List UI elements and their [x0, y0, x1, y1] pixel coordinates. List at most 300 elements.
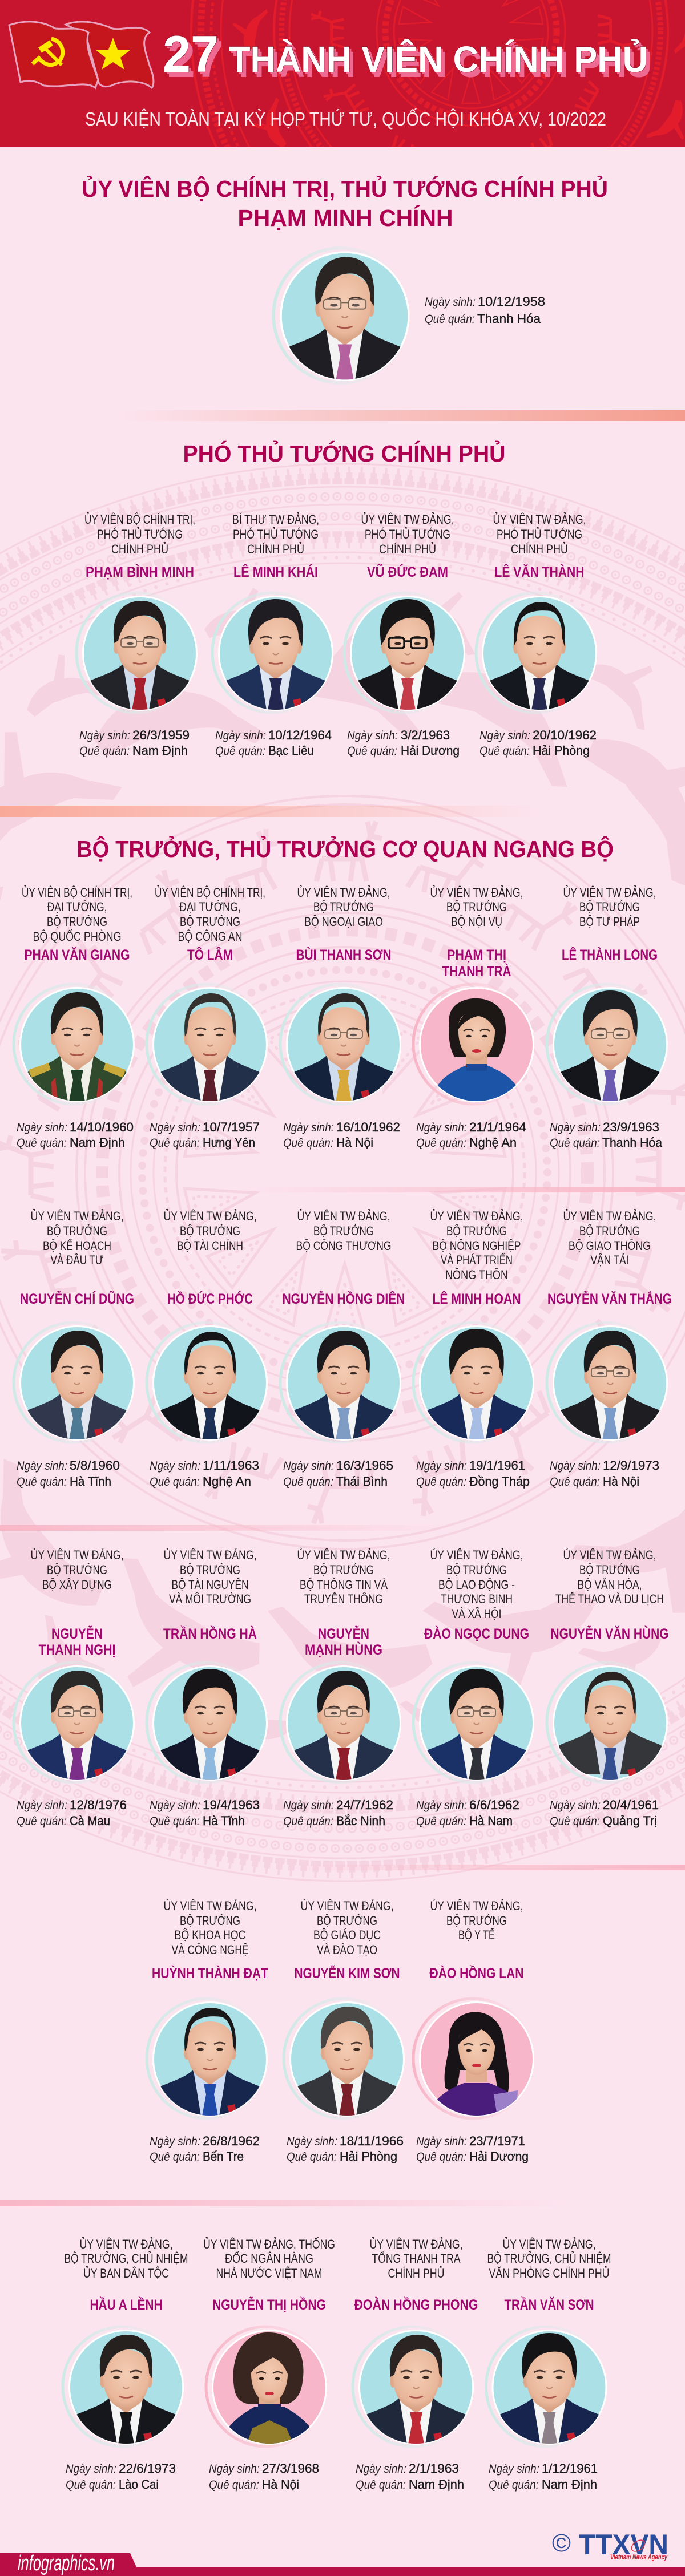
role: CHÍNH PHỦ	[111, 542, 168, 556]
portrait	[280, 1663, 408, 1782]
info: Hải Phòng	[533, 743, 590, 758]
role: ỦY VIÊN TW ĐẢNG,	[297, 885, 390, 900]
heading: Deputy Prime Ministers: PHÓ THỦ TƯỚNG CHÍNH PHỦ	[183, 440, 506, 467]
role: ỦY VIÊN TW ĐẢNG,	[370, 2237, 462, 2251]
member: Nguyễn Kim Sơn	[283, 1899, 411, 2163]
info: Quê quán:	[150, 1475, 200, 1489]
info: 20/10/1962	[533, 728, 597, 742]
role	[563, 885, 656, 929]
title: THÀNH VIÊN CHÍNH PHỦ	[229, 38, 648, 80]
info	[150, 2134, 260, 2163]
role: PHÓ THỦ TƯỚNG	[365, 527, 450, 541]
portrait	[206, 2327, 327, 2446]
info: Hải Dương	[401, 743, 460, 758]
title: 27	[167, 31, 223, 88]
info: Quê quán:	[416, 1815, 466, 1828]
role: BỘ KHOA HỌC	[175, 1928, 246, 1942]
role	[203, 2237, 335, 2280]
info: Quê quán:	[416, 1137, 466, 1150]
info: Ngày sinh:	[150, 1121, 200, 1134]
info: 14/10/1960	[70, 1120, 134, 1134]
role: BỘ TRƯỞNG	[180, 915, 240, 929]
role: TRUYỀN THÔNG	[304, 1592, 383, 1606]
info: 16/10/1962	[336, 1120, 400, 1134]
info	[66, 2461, 176, 2492]
role: BỘ KẾ HOẠCH	[43, 1239, 111, 1253]
role: BỘ TRƯỞNG	[579, 900, 640, 914]
info: 19/1/1961	[469, 1458, 525, 1473]
role	[297, 1548, 390, 1606]
role: BỘ TRƯỞNG	[446, 1224, 507, 1238]
info: 12/9/1973	[603, 1458, 659, 1473]
info: Quê quán:	[215, 745, 265, 758]
name: THANH NGHỊ	[39, 1642, 115, 1658]
info: Ngày sinh:	[416, 1121, 467, 1134]
info	[356, 2461, 464, 2492]
name	[442, 947, 511, 980]
info	[550, 1458, 659, 1489]
name: LÊ MINH HOAN	[433, 1290, 521, 1307]
info: Phạm Minh Chính: Thanh Hóa	[477, 312, 541, 326]
info: Quê quán:	[283, 1475, 333, 1489]
info: 5/8/1960	[70, 1458, 120, 1473]
portrait	[352, 2327, 480, 2446]
info: Ngày sinh:	[416, 1459, 467, 1473]
name: LÊ MINH KHÁI	[233, 563, 318, 580]
name: TRẦN VĂN SƠN	[505, 2296, 594, 2313]
role: BỘ QUỐC PHÒNG	[33, 929, 121, 944]
info: 26/3/1959	[132, 728, 190, 742]
role: ỦY VIÊN TW ĐẢNG,	[563, 1209, 656, 1223]
info: Lào Cai	[119, 2477, 159, 2492]
role: ỦY VIÊN TW ĐẢNG,	[31, 1209, 123, 1223]
name: TÔ LÂM	[187, 946, 233, 963]
name: HUỲNH THÀNH ĐẠT	[152, 1964, 268, 1981]
role	[31, 1209, 123, 1267]
info: Ngày sinh:	[550, 1121, 601, 1134]
role: BỘ TƯ PHÁP	[579, 915, 640, 929]
name: LÊ VĂN THÀNH	[494, 563, 585, 580]
info: 2/1/1963	[409, 2461, 459, 2476]
portrait: Phạm Minh Chính	[273, 248, 417, 383]
info: Quê quán:	[480, 745, 530, 758]
subtitle: SAU KIỆN TOÀN TẠI KỲ HỌP THỨ TƯ, QUỐC HỘI KHÓA XV, 10/2022	[85, 108, 606, 130]
name: LÊ THÀNH LONG	[562, 946, 658, 963]
info: Quê quán:	[416, 2150, 466, 2163]
role: ĐỐC NGÂN HÀNG	[225, 2251, 313, 2266]
member: Nguyễn Mạnh Hùng	[280, 1548, 408, 1828]
role	[22, 885, 132, 944]
member: Huỳnh Thành Đạt	[146, 1899, 274, 2163]
info: Bến Tre	[203, 2149, 244, 2163]
info: Ngày sinh:	[150, 1799, 200, 1812]
info	[209, 2461, 319, 2492]
role: BỘ TRƯỞNG	[446, 1563, 507, 1577]
info: Hà Nội	[603, 1474, 639, 1489]
name: ĐOÀN HỒNG PHONG	[354, 2296, 478, 2313]
member: Nguyễn Thanh Nghị	[13, 1548, 141, 1828]
logo: TTXVN: TTXVN	[579, 2529, 668, 2561]
name: NGUYỄN KIM SƠN	[295, 1964, 400, 1981]
info: Ngày sinh:	[17, 1459, 67, 1473]
title: 27	[165, 28, 221, 86]
info	[79, 728, 190, 758]
footer bar: infographics.vn	[18, 2551, 115, 2575]
info: Quê quán:	[416, 1475, 466, 1489]
info: Quê quán:	[66, 2478, 116, 2492]
name: ĐÀO HỒNG LAN	[429, 1964, 524, 1981]
name	[39, 1625, 115, 1658]
member: Lê Thành Long	[546, 885, 674, 1150]
role: ỦY VIÊN BỘ CHÍNH TRỊ,	[84, 512, 195, 527]
info: Quê quán:	[550, 1815, 600, 1828]
role	[430, 1899, 523, 1942]
role	[84, 512, 195, 556]
role: BÍ THƯ TW ĐẢNG,	[232, 512, 319, 527]
info: 16/3/1965	[336, 1458, 393, 1473]
info: Phạm Minh Chính: 10/12/1958	[478, 294, 545, 309]
title: THÀNH VIÊN CHÍNH PHỦ	[233, 43, 652, 85]
role: BỘ Y TẾ	[458, 1928, 495, 1942]
info: Nam Định	[409, 2477, 464, 2492]
role: ỦY VIÊN TW ĐẢNG,	[493, 512, 586, 527]
info: Ngày sinh:	[283, 1459, 334, 1473]
info: Nam Định	[132, 743, 188, 758]
member: Bùi Thanh Sơn	[280, 885, 408, 1150]
info: Quê quán:	[550, 1137, 600, 1150]
info: Ngày sinh:	[17, 1121, 67, 1134]
portrait	[546, 1663, 674, 1782]
info: Quê quán:	[79, 745, 130, 758]
portrait	[344, 593, 472, 713]
heading: Ministers: BỘ TRƯỞNG, THỦ TRƯỞNG CƠ QUAN NGANG BỘ	[76, 836, 614, 862]
role: ỦY VIÊN TW ĐẢNG,	[297, 1209, 390, 1223]
info: Ngày sinh:	[215, 729, 266, 742]
role: BỘ GIÁO DỤC	[313, 1928, 381, 1942]
info	[347, 728, 460, 758]
info: Quê quán:	[17, 1815, 67, 1828]
info: Quảng Trị	[603, 1814, 657, 1828]
background: faint bronze drum pattern	[0, 464, 685, 1881]
icon: party flag	[9, 22, 98, 88]
role: BỘ TRƯỞNG	[47, 1224, 107, 1238]
info: Hà Nam	[469, 1814, 513, 1828]
info: 21/1/1964	[469, 1120, 526, 1134]
member: Trần Hồng Hà	[146, 1548, 274, 1828]
info: Quê quán:	[356, 2478, 406, 2492]
portrait	[146, 1999, 274, 2118]
info	[150, 1798, 260, 1828]
role: BỘ TRƯỞNG	[180, 1914, 240, 1928]
icon: Vietnam flag	[66, 22, 154, 88]
info	[17, 1120, 134, 1150]
info	[215, 728, 332, 758]
role: ỦY BAN DÂN TỘC	[83, 2266, 169, 2280]
info: Ngày sinh:	[79, 729, 130, 742]
info: 1/11/1963	[203, 1458, 259, 1473]
role: ỦY VIÊN TW ĐẢNG,	[80, 2237, 172, 2251]
portrait	[62, 2327, 190, 2446]
name: PHAN VĂN GIANG	[24, 947, 130, 963]
role: BỘ NÔNG NGHIỆP	[433, 1239, 521, 1253]
member: Hồ Đức Phớc	[146, 1209, 274, 1489]
member: Tô Lâm	[146, 885, 274, 1150]
portrait	[485, 2327, 613, 2446]
info: Nghệ An	[203, 1474, 251, 1489]
info: Bạc Liêu	[268, 743, 314, 758]
info: 12/8/1976	[70, 1798, 127, 1812]
role: BỘ TRƯỞNG	[446, 900, 507, 914]
heading: Prime Minister: PHẠM MINH CHÍNH	[237, 205, 453, 231]
member: Phạm Thị Thanh Trà	[413, 885, 533, 1150]
member: Phạm Bình Minh	[76, 512, 204, 758]
info: Hưng Yên	[203, 1135, 255, 1150]
info: Quê quán:	[150, 1137, 200, 1150]
info: Nam Định	[542, 2477, 597, 2492]
info	[550, 1798, 659, 1828]
role: BỘ TÀI CHÍNH	[177, 1239, 243, 1253]
title: THÀNH VIÊN CHÍNH PHỦ	[231, 41, 650, 82]
member: Lê Minh Hoan	[413, 1209, 541, 1489]
info: Ngày sinh:	[550, 1799, 601, 1812]
info: 3/2/1963	[401, 728, 450, 742]
role	[487, 2237, 611, 2280]
info: 20/4/1961	[603, 1798, 659, 1812]
info: Phạm Minh Chính: Ngày sinh:	[425, 296, 476, 309]
info: 1/12/1961	[542, 2461, 598, 2476]
role: ỦY VIÊN TW ĐẢNG,	[300, 1899, 394, 1913]
role: PHÓ THỦ TƯỚNG	[497, 527, 582, 541]
info: Quê quán:	[209, 2478, 259, 2492]
footer bar	[0, 2551, 685, 2576]
info: Quê quán:	[17, 1475, 67, 1489]
role: ỦY VIÊN TW ĐẢNG,	[163, 1209, 257, 1223]
info: 24/7/1962	[336, 1798, 393, 1812]
info	[283, 1798, 393, 1828]
portrait	[546, 1323, 674, 1442]
info: Bắc Ninh	[336, 1814, 385, 1828]
member: Lê Minh Khái	[212, 512, 340, 758]
role: BỘ VĂN HÓA,	[578, 1578, 642, 1592]
info	[416, 1120, 526, 1150]
info: 26/8/1962	[203, 2134, 260, 2148]
role: VĂN PHÒNG CHÍNH PHỦ	[489, 2266, 610, 2280]
info: 23/9/1963	[603, 1120, 659, 1134]
info: Hà Nội	[336, 1135, 373, 1150]
role: THƯƠNG BINH	[441, 1592, 513, 1606]
role: VÀ CÔNG NGHỆ	[171, 1943, 249, 1957]
info: Ngày sinh:	[347, 729, 398, 742]
role	[563, 1209, 656, 1267]
info: 18/11/1966	[340, 2134, 404, 2148]
role	[31, 1548, 123, 1592]
member: Đào Ngọc Dung	[413, 1548, 541, 1828]
info	[416, 2134, 529, 2163]
name: TRẦN HỒNG HÀ	[163, 1625, 257, 1642]
role: BỘ TRƯỞNG, CHỦ NHIỆM	[64, 2251, 188, 2266]
role: BỘ CÔNG THƯƠNG	[296, 1239, 392, 1253]
role	[64, 2237, 188, 2280]
name: PHẠM BÌNH MINH	[86, 564, 194, 580]
role	[163, 1209, 257, 1253]
member: Nguyễn Thị Hồng	[203, 2237, 335, 2492]
name: THANH TRÀ	[442, 963, 511, 980]
role: ĐẠI TƯỚNG,	[47, 900, 107, 914]
info: Ngày sinh:	[283, 1799, 334, 1812]
role: CHÍNH PHỦ	[388, 2266, 444, 2280]
name: NGUYỄN THỊ HỒNG	[212, 2296, 326, 2313]
role	[163, 1899, 257, 1957]
info: Quê quán:	[150, 1815, 200, 1828]
panel: Prime Minister	[82, 176, 608, 383]
info	[550, 1120, 663, 1150]
divider bar	[245, 1187, 685, 1192]
info: Quê quán:	[150, 2150, 200, 2163]
portrait	[413, 984, 533, 1104]
role: VÀ XÃ HỘI	[452, 1607, 501, 1621]
info: Nam Định	[70, 1135, 125, 1150]
role: TỔNG THANH TRA	[372, 2251, 461, 2266]
info: Ngày sinh:	[356, 2462, 406, 2476]
role: BỘ TRƯỞNG	[317, 1914, 377, 1928]
role	[361, 512, 454, 556]
info	[480, 728, 597, 758]
role: ỦY VIÊN TW ĐẢNG,	[430, 1209, 523, 1223]
info: Ngày sinh:	[416, 1799, 467, 1812]
role: BỘ TRƯỞNG	[579, 1224, 640, 1238]
role: BỘ THÔNG TIN VÀ	[300, 1578, 388, 1592]
info: Thái Bình	[336, 1474, 388, 1489]
info: Phạm Minh Chính	[425, 294, 545, 326]
role: BỘ TRƯỞNG	[47, 1563, 107, 1577]
role: BỘ TRƯỞNG	[579, 1563, 640, 1577]
member: Trần Văn Sơn	[485, 2237, 613, 2492]
info	[150, 1120, 260, 1150]
info: Quê quán:	[17, 1137, 67, 1150]
role: BỘ CÔNG AN	[178, 929, 242, 944]
portrait	[146, 1323, 274, 1442]
role: ỦY VIÊN TW ĐẢNG,	[502, 2237, 596, 2251]
info	[17, 1458, 120, 1489]
info: Quê quán:	[283, 1815, 333, 1828]
role: ỦY VIÊN BỘ CHÍNH TRỊ,	[22, 885, 132, 900]
name: ĐÀO NGỌC DUNG	[424, 1625, 529, 1642]
info	[283, 1458, 393, 1489]
role: VÀ ĐẦU TƯ	[50, 1253, 104, 1267]
info: Ngày sinh:	[150, 2135, 200, 2148]
role: ỦY VIÊN TW ĐẢNG,	[297, 1548, 390, 1562]
info: Quê quán:	[550, 1475, 600, 1489]
info: 23/7/1971	[469, 2134, 525, 2148]
info: 22/6/1973	[119, 2461, 176, 2476]
role: CHÍNH PHỦ	[247, 542, 304, 556]
info	[150, 1458, 259, 1489]
title: 27	[163, 26, 219, 83]
portrait	[76, 593, 204, 713]
info: Ngày sinh:	[416, 2135, 467, 2148]
divider bar	[285, 1865, 685, 1870]
role: PHÓ THỦ TƯỚNG	[233, 527, 319, 541]
role: VÀ ĐÀO TẠO	[317, 1943, 377, 1957]
info	[489, 2461, 598, 2492]
name: HẦU A LỀNH	[90, 2296, 162, 2313]
heading: Prime Minister: ỦY VIÊN BỘ CHÍNH TRỊ, THỦ TƯỚNG CHÍNH PHỦ	[82, 176, 608, 202]
info: 10/12/1964	[268, 728, 332, 742]
role	[297, 885, 390, 929]
name	[305, 1625, 382, 1658]
role: ỦY VIÊN TW ĐẢNG,	[361, 512, 454, 527]
name: NGUYỄN	[51, 1625, 103, 1642]
info: Quê quán:	[283, 1137, 333, 1150]
info: Ngày sinh:	[150, 1459, 200, 1473]
info: Quê quán:	[287, 2150, 337, 2163]
header banner	[0, 0, 685, 147]
role	[370, 2237, 462, 2280]
divider bar	[0, 2200, 571, 2206]
divider bar	[114, 410, 685, 421]
member: Nguyễn Văn Thắng	[546, 1209, 674, 1489]
role: NÔNG THÔN	[445, 1268, 508, 1282]
member: Nguyễn Hồng Diên	[280, 1209, 408, 1489]
info: Hà Tĩnh	[203, 1814, 245, 1828]
role: BỘ TRƯỞNG	[180, 1224, 240, 1238]
role: BỘ GIAO THÔNG	[569, 1239, 651, 1253]
role: VÀ MÔI TRƯỜNG	[169, 1592, 251, 1606]
portrait	[212, 593, 340, 713]
name: NGUYỄN CHÍ DŨNG	[20, 1290, 134, 1307]
role: VÀ PHÁT TRIỂN	[441, 1253, 513, 1267]
portrait	[476, 593, 603, 713]
info: Ngày sinh:	[66, 2462, 116, 2476]
info: Phạm Minh Chính: Quê quán:	[425, 313, 475, 326]
info: Hải Phòng	[340, 2149, 397, 2163]
portrait	[280, 1323, 408, 1442]
role: BỘ XÂY DỰNG	[42, 1578, 112, 1592]
role: BỘ LAO ĐỘNG -	[438, 1578, 515, 1592]
role: CHÍNH PHỦ	[511, 542, 568, 556]
info	[283, 1120, 400, 1150]
member: Hầu A Lềnh	[62, 2237, 190, 2492]
info: 10/7/1957	[203, 1120, 260, 1134]
role: VẬN TẢI	[590, 1253, 629, 1267]
name: NGUYỄN	[318, 1625, 369, 1642]
info: Ngày sinh:	[17, 1799, 67, 1812]
info: Đồng Tháp	[469, 1474, 530, 1489]
role	[430, 885, 523, 929]
portrait	[413, 1999, 533, 2118]
role: BỘ TRƯỞNG	[313, 900, 374, 914]
role: ỦY VIÊN TW ĐẢNG,	[430, 1899, 523, 1913]
member: Nguyễn Chí Dũng	[13, 1209, 141, 1489]
info: Ngày sinh:	[489, 2462, 539, 2476]
role	[163, 1548, 257, 1606]
role: BỘ TÀI NGUYÊN	[171, 1578, 249, 1592]
name: HỒ ĐỨC PHỚC	[167, 1290, 253, 1307]
portrait	[146, 1663, 274, 1782]
info: Quê quán:	[489, 2478, 539, 2492]
title	[163, 26, 652, 88]
role: BỘ NỘI VỤ	[451, 915, 502, 929]
info: Cà Mau	[70, 1814, 110, 1828]
role: ỦY VIÊN TW ĐẢNG,	[563, 885, 656, 900]
portrait	[280, 984, 408, 1104]
name: PHẠM THỊ	[447, 947, 506, 963]
portrait	[146, 984, 274, 1104]
info: Hà Nội	[262, 2477, 299, 2492]
role: ỦY VIÊN TW ĐẢNG,	[31, 1548, 123, 1562]
info: Ngày sinh:	[287, 2135, 337, 2148]
member: Lê Văn Thành	[476, 512, 603, 758]
